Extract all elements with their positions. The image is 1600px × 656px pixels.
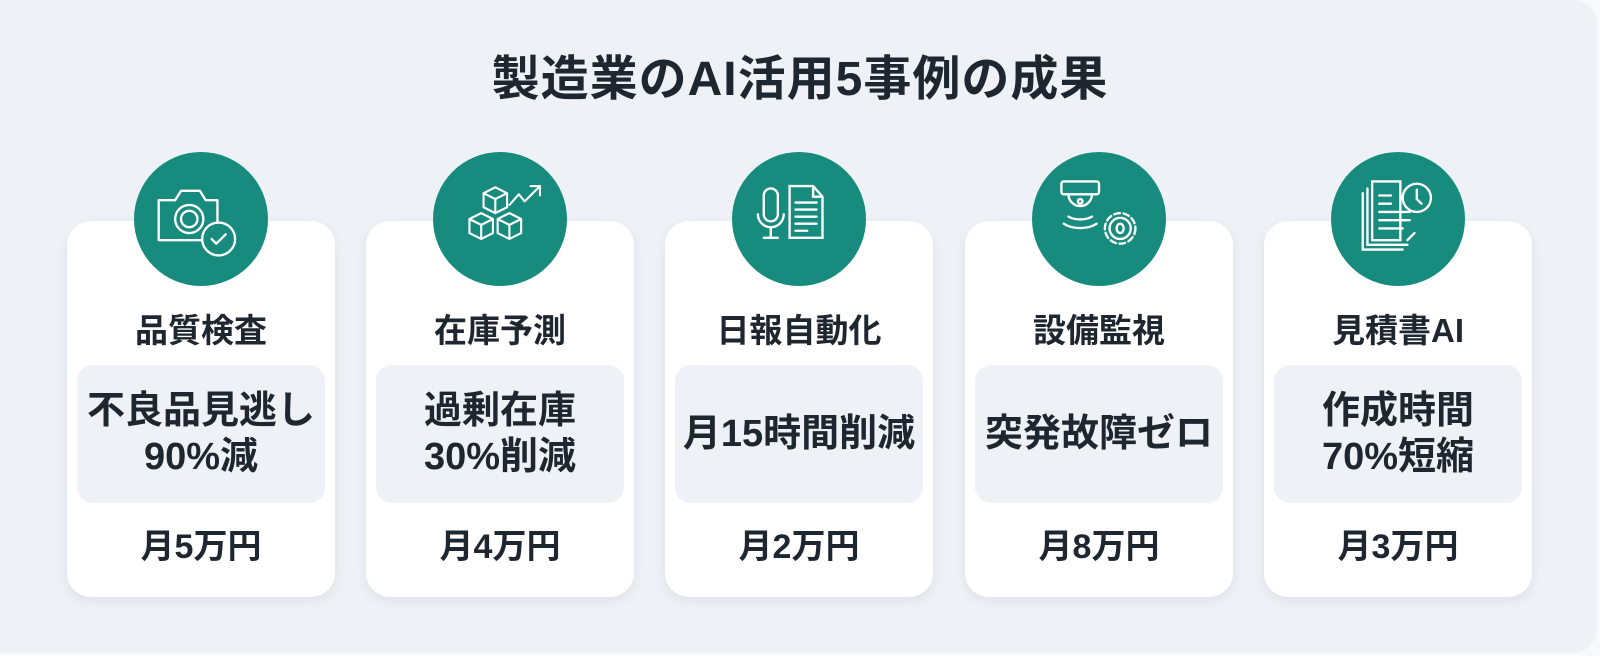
result box bbox=[77, 365, 325, 503]
heading: 品質検査 bbox=[135, 312, 267, 349]
result box bbox=[376, 365, 624, 503]
icon: documents with clock bbox=[1331, 152, 1465, 286]
price: 月4万円 bbox=[440, 528, 560, 566]
result box: 作成時間 bbox=[1322, 390, 1474, 432]
icon: camera check bbox=[134, 152, 268, 286]
panel: daily report automation bbox=[665, 221, 933, 597]
heading: 日報自動化 bbox=[716, 312, 882, 349]
result box bbox=[1274, 365, 1522, 503]
title: 製造業のAI活用5事例の成果 bbox=[492, 53, 1108, 106]
result box: 不良品見逃し bbox=[87, 390, 315, 432]
result box: 90%減 bbox=[144, 436, 258, 478]
result box: 過剰在庫 bbox=[424, 390, 576, 432]
price: 月8万円 bbox=[1039, 528, 1159, 566]
result box bbox=[675, 365, 923, 503]
icon: sensor and gear bbox=[1032, 152, 1166, 286]
result box bbox=[975, 365, 1223, 503]
heading: 設備監視 bbox=[1033, 312, 1165, 349]
price: 月5万円 bbox=[141, 528, 261, 566]
result box: 突発故障ゼロ bbox=[985, 413, 1213, 455]
panel: estimate AI bbox=[1264, 221, 1532, 597]
panel: quality inspection bbox=[67, 221, 335, 597]
result box: 70%短縮 bbox=[1322, 436, 1474, 478]
result box: 月15時間削減 bbox=[683, 413, 915, 455]
price: 月3万円 bbox=[1338, 528, 1458, 566]
heading: 見積書AI bbox=[1332, 312, 1464, 349]
result box: 30%削減 bbox=[424, 436, 576, 478]
icon: boxes with trend bbox=[433, 152, 567, 286]
icon: mic and document bbox=[732, 152, 866, 286]
price: 月2万円 bbox=[739, 528, 859, 566]
heading: 在庫予測 bbox=[434, 312, 566, 349]
panel: inventory forecast bbox=[366, 221, 634, 597]
panel: equipment monitoring bbox=[965, 221, 1233, 597]
